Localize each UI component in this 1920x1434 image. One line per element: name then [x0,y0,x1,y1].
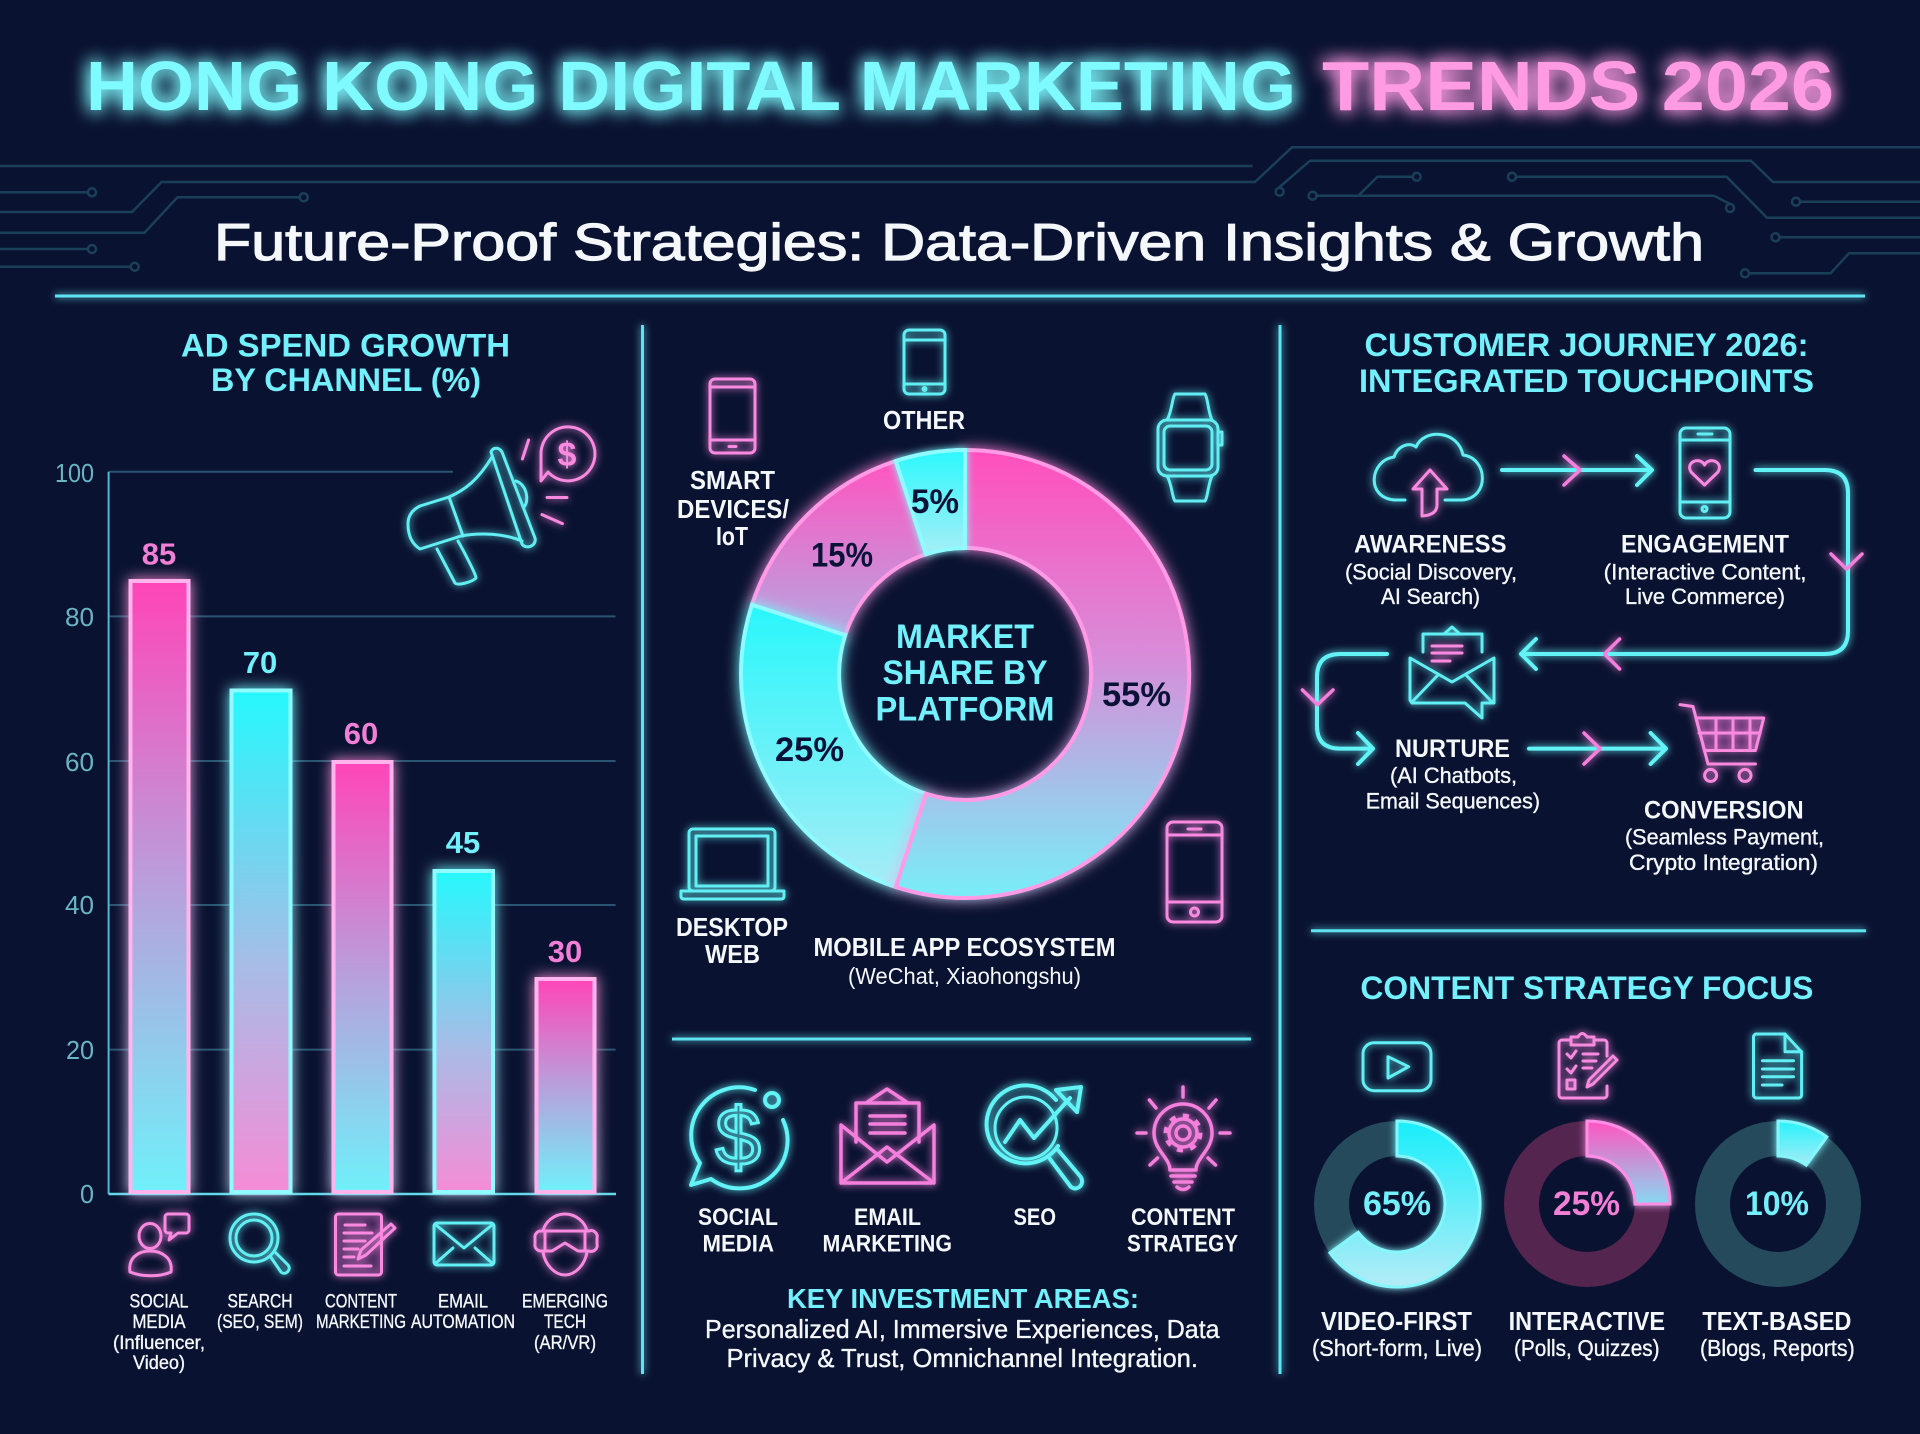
channel labels: MEDIA [132,1312,186,1333]
radial: text-based 10%: 10% [1745,1185,1809,1223]
axis labels: 60 [65,747,94,777]
chart grid and axis [109,472,616,1194]
strategy labels: INTERACTIVE [1509,1306,1665,1336]
bar values: 60 [344,716,378,751]
icon: megaphone with dollar bubble [408,427,595,584]
bar values: 45 [446,825,480,860]
axis labels: 40 [65,890,94,920]
platform labels: MOBILE APP ECOSYSTEM [814,932,1116,962]
key investment labels: STRATEGY [1127,1231,1238,1258]
journey labels: AWARENESS [1354,531,1506,559]
channel labels: SEARCH [228,1292,292,1313]
platform labels: OTHER [883,405,965,435]
journey labels: (Seamless Payment, [1625,824,1824,849]
strategy labels: (Short-form, Live) [1312,1335,1482,1361]
platform labels: IoT [716,521,748,551]
donut centre title: MARKET [896,618,1034,656]
journey labels: Live Commerce) [1625,584,1785,609]
icon: clipboard checklist [1559,1034,1617,1098]
icon: content strategy bulb [1137,1087,1230,1190]
donut percentages: 5% [911,483,959,521]
heading: content strategy focus: CONTENT STRATEGY FOCUS [1360,970,1813,1006]
journey labels: Crypto Integration) [1629,850,1818,875]
icon: tablet other [904,330,945,394]
channel labels: EMAIL [438,1292,488,1313]
channel labels: TECH [544,1312,586,1333]
key investment areas text: KEY INVESTMENT AREAS: [787,1283,1139,1314]
heading: ad spend growth: AD SPEND GROWTH [181,327,510,363]
heading: ad spend growth: BY CHANNEL (%) [211,362,481,398]
donut percentages: 25% [775,731,844,769]
strategy icons [1363,1034,1802,1098]
channel icons [130,1214,597,1276]
donut percentages: 15% [811,536,873,574]
icon: text document [1753,1034,1802,1098]
key investment labels: SOCIAL [698,1204,778,1231]
icon: engagement phone [1680,428,1730,518]
icon: nurture envelope [1410,627,1494,718]
platform labels: DEVICES/ [677,494,789,524]
channel labels: MARKETING [316,1312,406,1333]
section dividers [55,296,1866,1374]
radial: interactive 25%: 25% [1553,1185,1620,1223]
title: TRENDS 2026 [1322,47,1834,125]
icon: social media person [130,1214,189,1276]
strategy labels [1312,1306,1855,1361]
platform labels: SMART [690,465,775,495]
strategy labels: (Blogs, Reports) [1700,1335,1855,1361]
panel: content strategy focus [1312,970,1855,1361]
icon: social media dollar bubble [691,1087,788,1188]
journey labels [1345,531,1824,875]
heading: customer journey [1359,327,1814,399]
arrow: nurture loop [1302,654,1387,764]
panel: customer journey [1302,327,1862,875]
journey labels: (Interactive Content, [1604,560,1806,584]
icon: email envelope [434,1223,494,1265]
arrow: engagement to nurture [1521,470,1862,669]
key investment labels: CONTENT [1131,1204,1235,1231]
panel: market share by platform [676,330,1238,1373]
icon: awareness cloud [1374,434,1482,516]
axis labels [55,458,94,1209]
icon: seo magnifier chart [987,1085,1082,1188]
heading: customer journey: CUSTOMER JOURNEY 2026: [1364,327,1808,363]
arrow: nurture to conversion [1529,733,1666,764]
platform labels: DESKTOP [676,912,788,942]
key investment areas text: Personalized AI, Immersive Experiences, Data [705,1314,1220,1344]
key investment labels: EMAIL [854,1204,921,1231]
axis labels: 100 [55,458,94,488]
subtitle: Future-Proof Strategies: Data-Driven Insights & Growth [214,214,1704,272]
radial: interactive 25% [1522,1121,1670,1270]
icon: laptop [681,829,784,899]
circuit board pattern [0,147,1920,277]
arrow: awareness to engagement [1502,456,1652,485]
icon: content document with pen [336,1214,395,1275]
axis labels: 20 [66,1035,94,1065]
segment: other 5% [896,450,965,554]
title: HONG KONG DIGITAL MARKETING [86,47,1296,125]
key investment labels [698,1204,1238,1258]
icon: conversion cart [1680,705,1764,781]
icon: social media dollar bubble: $ [715,1092,761,1183]
donut chart [741,450,1189,898]
icon: tablet smart devices [710,379,755,453]
strategy labels: (Polls, Quizzes) [1514,1335,1660,1361]
key investment areas text: Privacy & Trust, Omnichannel Integration. [726,1343,1198,1373]
key investment labels: SEO [1014,1204,1056,1231]
key investment labels: MEDIA [702,1231,774,1258]
icon: VR headset [535,1214,597,1275]
channel labels: (SEO, SEM) [217,1312,303,1333]
channel labels: EMERGING [522,1292,608,1313]
key investment icons [691,1085,1230,1190]
platform labels: (WeChat, Xiaohongshu) [848,963,1081,989]
key investment areas text [705,1283,1220,1373]
journey icons [1374,428,1764,781]
segment: smart devices 15% [752,461,926,635]
platform labels [676,405,1116,989]
radial: video-first 65%: 65% [1363,1185,1431,1223]
platform icons [681,330,1222,922]
donut centre title: SHARE BY [882,654,1048,692]
heading: customer journey: INTEGRATED TOUCHPOINTS [1359,363,1814,399]
strategy labels: TEXT-BASED [1702,1306,1851,1336]
key investment labels: MARKETING [822,1231,952,1258]
channel labels: SOCIAL [130,1292,188,1313]
channel labels: Video) [133,1353,185,1374]
platform labels: WEB [705,939,760,969]
journey labels: (Social Discovery, [1345,560,1517,584]
bar values [142,537,582,969]
segment: desktop web 25% [741,605,926,887]
axis labels: 0 [80,1179,94,1209]
channel labels: (Influencer, [113,1333,205,1354]
panel: ad spend growth [55,327,616,1374]
radial: text-based 10% [1712,1121,1844,1270]
bar chart [55,458,616,1209]
axis labels: 80 [65,602,94,632]
journey labels: ENGAGEMENT [1621,531,1789,559]
journey labels: NURTURE [1395,735,1510,763]
journey labels: CONVERSION [1644,797,1804,825]
icon: email marketing envelope [841,1089,934,1183]
icon: video play [1363,1043,1431,1091]
flow arrows [1302,456,1862,764]
channel labels [113,1292,608,1374]
journey labels: (AI Chatbots, [1390,763,1517,788]
segment: mobile app 55% [896,450,1189,898]
donut percentages: 55% [1102,676,1171,714]
donut centre title: PLATFORM [876,690,1054,728]
icon: phone [1167,822,1222,922]
strategy labels: VIDEO-FIRST [1321,1306,1472,1336]
journey labels: Email Sequences) [1366,789,1540,814]
channel labels: AUTOMATION [411,1312,515,1333]
bars [130,581,594,1192]
icon: smartwatch [1158,394,1222,501]
bar values: 70 [243,645,277,680]
icon: search magnifier [230,1214,289,1273]
heading: ad spend growth [181,327,510,398]
donut centre title [876,618,1054,728]
bar values: 30 [548,934,582,969]
donut percentages [775,483,1171,769]
bar values: 85 [142,537,176,572]
journey labels: AI Search) [1381,584,1480,609]
channel labels: CONTENT [325,1292,397,1313]
icon: megaphone with dollar bubble: $ [558,436,577,474]
title [86,47,1834,125]
radial: video-first 65% [1330,1121,1480,1287]
channel labels: (AR/VR) [534,1333,596,1354]
